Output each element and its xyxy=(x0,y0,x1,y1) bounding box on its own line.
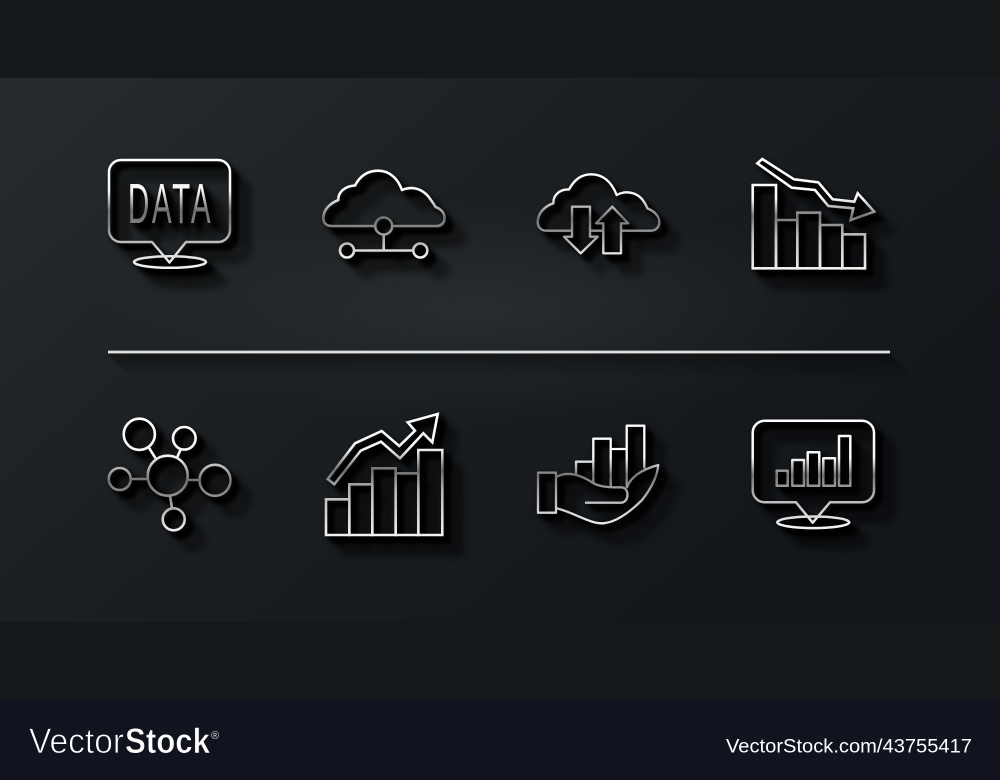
down arrow xyxy=(564,207,598,253)
background bottom band xyxy=(0,622,1000,700)
icon: declining bar chart xyxy=(753,159,874,268)
DATA label: A xyxy=(191,172,211,236)
VectorStock logo: Stock xyxy=(125,722,210,761)
VectorStock logo xyxy=(29,722,219,761)
background main panel xyxy=(0,78,1000,622)
falling arrow xyxy=(757,159,874,220)
icon: cloud network xyxy=(323,171,444,258)
up arrow xyxy=(596,207,628,253)
icon: DATA speech bubble pin xyxy=(109,160,230,268)
icon: hand holding bar chart xyxy=(538,426,658,523)
hand outline xyxy=(557,474,627,503)
VectorStock logo: ® xyxy=(211,730,219,742)
DATA label: D xyxy=(128,172,149,236)
VectorStock logo: Vector xyxy=(29,722,124,761)
footer bar xyxy=(0,700,1000,780)
icon: cloud upload download xyxy=(538,174,659,253)
DATA label: A xyxy=(152,172,172,236)
divider line shadow xyxy=(108,354,915,380)
background centre glow xyxy=(0,78,1000,622)
image id text: VectorStock.com/43755417 xyxy=(726,736,972,758)
icon: chart speech bubble pin xyxy=(753,421,874,528)
rising arrow xyxy=(328,414,438,484)
icon: network hub xyxy=(109,419,230,530)
background top band xyxy=(0,0,1000,78)
DATA label: T xyxy=(172,172,190,236)
icon: rising bar chart xyxy=(326,414,442,535)
divider line xyxy=(108,350,890,354)
